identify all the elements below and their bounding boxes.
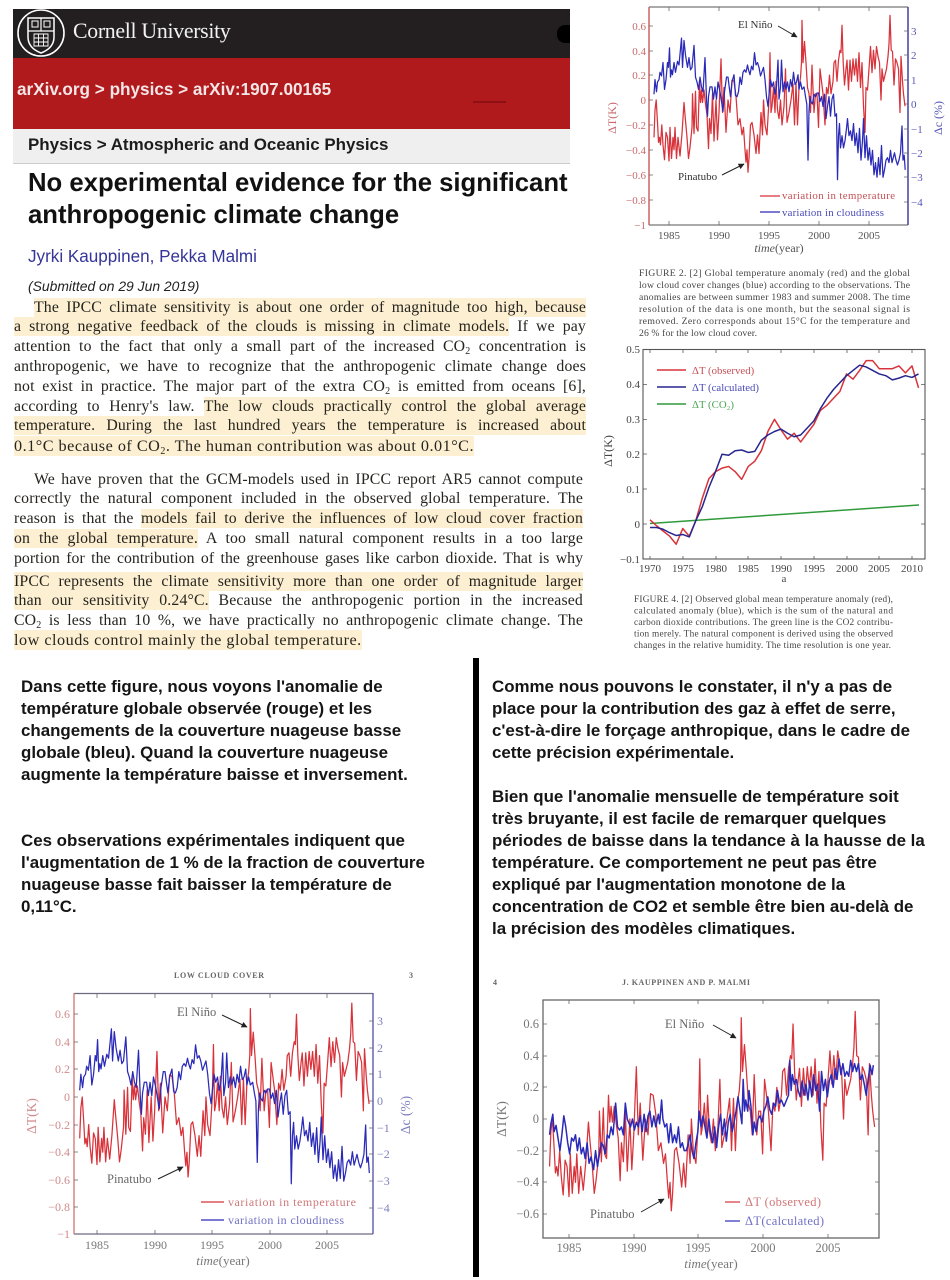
French commentary: right column: Bien que l'anomalie mensuelle de température soit (492, 787, 899, 806)
chart 4 y axis labels: −0.4 (516, 1175, 540, 1189)
page header: J. Kauppinen and P. Malmi: J. KAUPPINEN AND P. MALMI (622, 978, 750, 987)
chart: observed and calculated anomaly with CO2 (601, 344, 925, 585)
French commentary: right column: très bruyante, il est facile de remarquer quelques (492, 809, 886, 828)
chart 2 x axis labels: a (782, 573, 787, 585)
French commentary: left column: Ces observations expérimentales indiquent que (21, 831, 405, 850)
chart 4 x axis labels: 1995 (686, 1241, 710, 1255)
caption: Figure 2: 26 % for the low cloud cover. (639, 328, 757, 339)
chart 2 y axis labels: 0 (634, 519, 640, 531)
chart 3 x axis labels: 1990 (143, 1238, 167, 1252)
chart 3 right axis labels (377, 1014, 413, 1215)
chart 4 y axis labels: −0.2 (516, 1144, 539, 1158)
decorative dark blob (557, 25, 570, 43)
authors: Jyrki Kauppinen, Pekka Malmi (28, 247, 257, 266)
French commentary: left column: augmente la température baisse et inversement. (21, 765, 408, 784)
chart 3 cloudiness series (80, 1029, 369, 1184)
chart 3 right axis labels: 1 (377, 1067, 383, 1081)
French commentary: left column: Dans cette figure, nous voyons l'anomalie de (21, 677, 383, 696)
abstract paragraph 1: a strong negative feedback of the clouds is missing in climate models. If we pay (14, 318, 586, 335)
chart 1 x axis labels: 1990 (708, 230, 730, 242)
chart 3 x axis labels: 2000 (258, 1238, 282, 1252)
abstract paragraph 2: than our sensitivity 0.24°C. Because the anthropogenic portion in the increased (14, 592, 583, 609)
chart 4 annotations: Pinatubo (590, 1207, 634, 1221)
chart 3 x axis labels: 1995 (200, 1238, 224, 1252)
chart 3 right axis labels: −2 (377, 1147, 390, 1161)
paper title (28, 169, 568, 229)
chart 3 annotations: El Niño (177, 1005, 216, 1019)
chart 1 x axis labels: 1985 (658, 230, 680, 242)
French commentary: right column: cette précision expérimentale. (492, 743, 734, 762)
chart 3 left axis labels: −0.6 (48, 1173, 70, 1187)
chart 3 right axis labels: −3 (377, 1174, 390, 1188)
caption: Figure 4 (634, 594, 893, 651)
header: Cornell black bar (13, 9, 570, 58)
caption: Figure 4: carbon dioxide contributions. The green line is the CO2 contribu- (634, 618, 893, 628)
chart 2 x axis labels: 1990 (770, 563, 792, 575)
breadcrumb text: arXiv.org > physics > arXiv:1907.00165 (17, 79, 331, 99)
chart 3 right axis labels: Δc (%) (398, 1096, 413, 1134)
chart 3 right axis labels: 3 (377, 1014, 383, 1028)
chart 3 x axis labels (85, 1238, 339, 1268)
chart 1 right axis labels: 3 (911, 26, 917, 38)
chart 3 right axis labels: −4 (377, 1201, 390, 1215)
abstract paragraph 1: attention to the fact that only a small part of the increased CO2 concentration is (14, 338, 586, 357)
French commentary: right column: c'est-à-dire le forçage anthropique, dans le cadre de (492, 721, 910, 740)
chart: temperature and cloudiness, top right (605, 7, 945, 255)
chart 2 y axis labels: −0.1 (620, 554, 640, 566)
French commentary: left column: nuageuse basse fait baisser la température de (21, 875, 392, 894)
chart 4 legend: ΔT(calculated) (745, 1214, 824, 1228)
French commentary: left column: changements de la couverture nuageuse basse (21, 721, 401, 740)
caption: Figure 2: FIGURE 2. [2] Global temperature anomaly (red) and the global (639, 268, 910, 279)
chart 2 y axis labels: 0.5 (626, 344, 640, 356)
chart 4 calculated series (550, 1059, 873, 1170)
French commentary: left column: 0,11°C. (21, 897, 77, 916)
chart 1 left axis labels: 0.4 (632, 46, 646, 58)
chart 1 right axis labels: 2 (911, 50, 916, 62)
chart 1 right axis labels: Δc (%) (931, 101, 945, 135)
chart 1 temperature series (654, 15, 905, 172)
chart 2 y axis labels: 0.4 (626, 379, 640, 391)
chart 3 left axis labels (24, 1007, 70, 1241)
subject text: Physics > Atmospheric and Oceanic Physics (28, 135, 388, 154)
chart 4 y axis labels: 0.4 (523, 1049, 540, 1063)
caption: Figure 4: tion merely. The natural component is derived using the observed (634, 630, 893, 640)
chart 1 annotations: Pinatubo (678, 171, 718, 183)
chart 4 x axis labels: 2000 (750, 1241, 776, 1255)
chart 1 left axis labels: −0.6 (626, 170, 646, 182)
chart 1 left axis labels: −0.2 (626, 120, 646, 132)
chart 2 frame and ticks (643, 350, 925, 559)
abstract paragraph 1: according to Henry's law. The low clouds practically control the global average (14, 398, 586, 415)
chart 1 x axis labels: 2000 (808, 230, 830, 242)
chart 1 annotations (678, 19, 797, 183)
chart 2 calculated series (650, 365, 919, 537)
chart 2 legend: ΔT (observed) (692, 365, 755, 377)
subject bar: Physics > Atmospheric and Oceanic Physics (13, 129, 570, 164)
chart 4 frame and ticks (543, 1000, 879, 1238)
abstract paragraph 2 (14, 471, 583, 650)
chart 3 legend: variation in cloudiness (228, 1213, 344, 1227)
header: Cornell University wordmark: Cornell University (73, 19, 230, 43)
chart 1 right axis labels (911, 26, 945, 209)
chart 4 x axis labels: 2005 (816, 1241, 840, 1255)
chart 3 left axis labels: −0.8 (48, 1200, 70, 1214)
caption: Figure 2 (639, 268, 910, 339)
chart 1 x axis labels: 2005 (858, 230, 880, 242)
paper title: No experimental evidence for the significant (28, 169, 568, 197)
header: arXiv red breadcrumb bar (13, 58, 570, 129)
caption: Figure 4: FIGURE 4. [2] Observed global mean temperature anomaly (red), (634, 594, 893, 605)
vertical black divider (473, 658, 479, 1277)
French commentary: left column: température globale observée (rouge) et les (21, 699, 372, 718)
French commentary: left column: l'augmentation de 1 % de la fraction de couverture (21, 853, 425, 872)
caption: Figure 4: calculated anomaly (blue), which is the sum of the natural and (634, 606, 893, 616)
chart 4 y axis labels: 0.6 (523, 1017, 539, 1031)
chart 3 left axis labels: 0.4 (55, 1035, 70, 1049)
chart 4 legend (725, 1195, 824, 1228)
abstract paragraph 1 (14, 298, 586, 456)
French commentary: right column: température. Ce comportement ne peut pas être (492, 853, 877, 872)
chart 1 legend: variation in cloudiness (782, 207, 884, 219)
abstract paragraph 2: correctly the natural component included in the observed global temperature. The (14, 490, 583, 507)
chart 1 left axis labels: −0.4 (626, 145, 646, 157)
chart 4 y axis labels: 0.2 (523, 1080, 539, 1094)
abstract paragraph 2: CO2 is less than 10 %, we have practically no anthropogenic climate change. The (14, 612, 583, 631)
chart 3 legend (201, 1195, 356, 1227)
caption: Figure 2: removed. Zero corresponds about 15°C for the temperature and (639, 316, 910, 327)
chart 4 y axis labels: −0.6 (516, 1207, 539, 1221)
chart 4 y axis labels: 0 (533, 1112, 539, 1126)
submission date: (Submitted on 29 Jun 2019) (28, 278, 199, 294)
chart 2 y axis labels (601, 344, 640, 566)
chart 1 right axis labels: −2 (911, 148, 923, 160)
chart 1 right axis labels: −4 (911, 197, 923, 209)
chart 1 right axis labels: 0 (911, 99, 917, 111)
chart 3 x axis labels: 1985 (85, 1238, 109, 1252)
French commentary: right column: place pour la contribution des gaz à effet de serre, (492, 699, 896, 718)
chart 3 left axis labels: 0 (64, 1090, 70, 1104)
chart 4 annotations: El Niño (665, 1017, 704, 1031)
page header: LOW CLOUD COVER (174, 971, 413, 980)
French commentary: right column: expliqué par l'augmentation monotone de la (492, 875, 845, 894)
chart 1 legend: variation in temperature (782, 190, 895, 202)
page header: LOW CLOUD COVER: 3 (409, 971, 413, 980)
French commentary: left column: globale (bleu). Quand la couverture nuageuse (21, 743, 388, 762)
French commentary: right column: la précision des modèles climatiques. (492, 919, 795, 938)
chart 4 y axis labels (494, 1017, 540, 1221)
chart 4 annotations (590, 1017, 736, 1221)
chart 2 x axis labels: 1995 (803, 563, 826, 575)
chart 2 CO2 line (650, 505, 919, 524)
chart 1 annotations: El Niño (738, 19, 773, 31)
chart 2 x axis labels: 1970 (639, 563, 662, 575)
chart 3 left axis labels: 0.2 (55, 1062, 70, 1076)
chart 4 observed series (550, 1011, 875, 1211)
chart 1 cloudiness series (654, 38, 905, 180)
chart 3 frame and ticks (74, 993, 373, 1234)
chart 1 left axis labels: 0.6 (632, 21, 646, 33)
abstract paragraph 2: portion for the contribution of the greenhouse gases like carbon dioxide. That is why (14, 550, 583, 567)
chart 3 temperature series (80, 1003, 369, 1177)
abstract paragraph 2: reason is that the models fail to derive the influences of low cloud cover fraction (14, 510, 583, 527)
caption: Figure 2: resolution of the data is one month, but the seasonal signal is (639, 304, 910, 315)
chart 2 x axis labels: 1980 (705, 563, 728, 575)
chart 1 left axis labels (605, 21, 646, 232)
chart 1 right axis labels: −1 (911, 124, 923, 136)
chart 2 y axis labels: 0.3 (626, 414, 640, 426)
abstract paragraph 2: We have proven that the GCM-models used in IPCC report AR5 cannot compute (34, 471, 583, 488)
caption: Figure 4: changes in the relative humidity. The time resolution is one year. (634, 641, 891, 651)
caption: Figure 2: anomalies are between summer 1983 and summer 2008. The time (639, 292, 910, 303)
chart 1 right axis labels: −3 (911, 172, 923, 184)
chart 2 x axis labels: 2000 (836, 563, 858, 575)
chart 2 x axis labels: 2005 (868, 563, 890, 575)
chart 2 legend (657, 365, 759, 411)
chart 3 left axis labels: ΔT(K) (24, 1098, 39, 1134)
abstract paragraph 2: low clouds control mainly the global temperature. (14, 631, 362, 649)
chart 3 left axis labels: −0.4 (48, 1145, 70, 1159)
chart 4 x axis labels: 1990 (622, 1241, 646, 1255)
chart 3 annotations (107, 1005, 247, 1186)
chart 1 x axis labels: 1995 (758, 230, 780, 242)
chart 2 y axis labels: 0.2 (626, 449, 640, 461)
chart 2 legend: ΔT (CO₂) (692, 399, 734, 411)
chart 3 right axis labels: 0 (377, 1094, 383, 1108)
decorative red mark (473, 101, 506, 103)
French commentary: right column (492, 677, 925, 938)
page header: J. Kauppinen and P. Malmi: 4 (493, 978, 497, 987)
chart 2 x axis labels: 2010 (901, 563, 924, 575)
page header: J. Kauppinen and P. Malmi (493, 978, 750, 987)
abstract paragraph 2: IPCC represents the climate sensitivity more than one order of magnitude larger (14, 573, 583, 590)
chart 2 y axis labels: 0.1 (626, 484, 640, 496)
chart 1 left axis labels: −0.8 (626, 195, 646, 207)
chart 2 x axis labels: 1975 (672, 563, 694, 575)
caption: Figure 2: low cloud cover changes (blue) according to the observations. The (639, 280, 910, 291)
abstract paragraph 2: on the global temperature. A too small natural component results in a too large (14, 530, 583, 547)
chart 2 y axis labels: ΔT(K) (601, 435, 615, 467)
chart 1 x axis labels: time(year) (754, 241, 804, 255)
paper title: anthropogenic climate change (28, 201, 399, 229)
chart: observed and calculated temperature, bottom right (494, 1000, 879, 1271)
chart 4 x axis labels: 1985 (556, 1241, 582, 1255)
chart 1 right axis labels: 1 (911, 75, 916, 87)
abstract paragraph 1: The IPCC climate sensitivity is about one order of magnitude too high, because (34, 299, 586, 316)
chart 4 x axis labels (556, 1241, 840, 1271)
chart 3 x axis labels: 2005 (315, 1238, 339, 1252)
icon: Cornell seal (17, 9, 65, 57)
chart 4 legend: ΔT (observed) (745, 1195, 821, 1209)
chart 3 right axis labels: −1 (377, 1121, 390, 1135)
abstract paragraph 1: anthropogenic, we have to recognize that the anthropogenic climate change does (14, 358, 586, 375)
chart 1 left axis labels: ΔT(K) (605, 102, 619, 134)
French commentary: right column: Comme nous pouvons le constater, il n'y a pas de (492, 677, 892, 696)
French commentary: left column (21, 677, 425, 916)
French commentary: right column: périodes de baisse dans la tendance à la hausse de la (492, 831, 925, 850)
chart: temperature and cloudiness, bottom left (24, 993, 413, 1268)
chart 3 x axis labels: time(year) (196, 1253, 250, 1268)
chart 2 x axis labels (639, 563, 924, 585)
chart 1 left axis labels: 0.2 (632, 70, 646, 82)
chart 1 legend (760, 190, 895, 219)
chart 3 left axis labels: −0.2 (48, 1118, 70, 1132)
chart 3 left axis labels: 0.6 (55, 1007, 70, 1021)
chart 1 x axis labels (658, 230, 880, 255)
chart 4 x axis labels: time(year) (684, 1256, 738, 1271)
abstract paragraph 1: not exist in practice. The major part of the extra CO2 is emitted from oceans [6], (14, 378, 586, 397)
page header: LOW CLOUD COVER: LOW CLOUD COVER (174, 971, 264, 980)
French commentary: right column: concentration de CO2 et semble être bien au-delà de (492, 897, 913, 916)
chart 1 left axis labels: 0 (640, 95, 646, 107)
chart 1 frame and ticks (649, 7, 908, 225)
chart 4 y axis labels: ΔT(K) (494, 1101, 509, 1137)
chart 2 x axis labels: 1985 (737, 563, 760, 575)
chart 3 legend: variation in temperature (228, 1195, 356, 1209)
chart 1 left axis labels: −1 (634, 220, 646, 232)
chart 3 right axis labels: 2 (377, 1041, 383, 1055)
chart 2 observed series (650, 361, 919, 544)
chart 2 legend: ΔT (calculated) (692, 382, 759, 394)
abstract paragraph 1: temperature. During the last hundred years the temperature is increased about (14, 417, 586, 434)
chart 3 left axis labels: −1 (57, 1227, 70, 1241)
chart 3 annotations: Pinatubo (107, 1172, 151, 1186)
